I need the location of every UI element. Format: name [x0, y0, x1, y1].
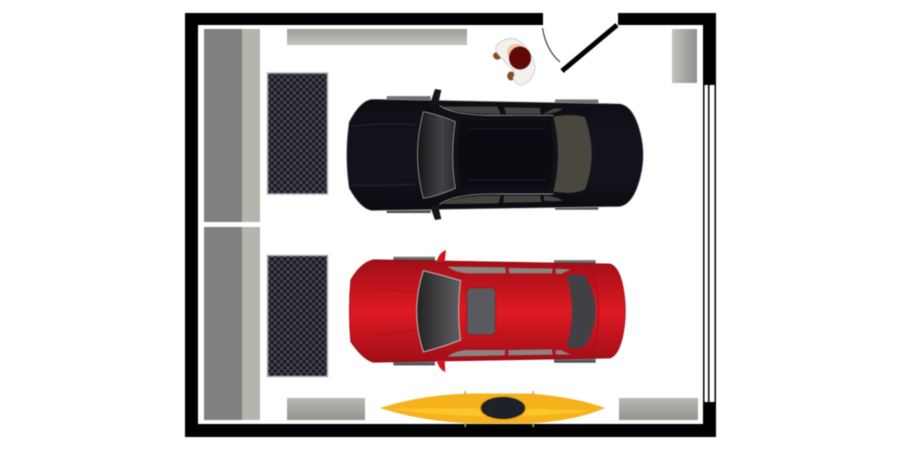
trunk seam — [591, 268, 599, 354]
mirrors — [430, 89, 441, 105]
windshield — [417, 271, 461, 352]
roof lines — [468, 129, 547, 180]
sunroof — [467, 288, 496, 335]
upper right storage box — [672, 29, 697, 83]
rear window — [567, 274, 596, 349]
roof — [458, 121, 553, 187]
walls — [185, 13, 716, 437]
icon: person from above — [492, 38, 535, 85]
hood creases — [375, 289, 415, 335]
wheels — [393, 257, 596, 365]
red car — [349, 250, 625, 372]
kayak — [380, 391, 605, 427]
door opening and door — [542, 12, 618, 71]
windshield — [417, 112, 455, 198]
mirrors — [437, 250, 446, 262]
window — [703, 85, 716, 402]
black car — [346, 89, 643, 220]
body — [346, 99, 643, 211]
rear window — [553, 115, 592, 193]
hood creases — [352, 124, 415, 186]
top storage box — [287, 29, 467, 45]
wheels — [387, 96, 598, 213]
bottom left storage box — [287, 398, 365, 420]
window trim — [439, 105, 553, 205]
panel: upper left shelving — [204, 29, 260, 222]
upper floor mat — [268, 73, 328, 194]
side windows — [442, 107, 563, 204]
lower floor mat — [268, 256, 328, 376]
panel: lower left shelving — [204, 227, 260, 420]
side windows — [447, 267, 571, 357]
body — [349, 260, 625, 362]
bottom right storage box — [619, 398, 698, 420]
